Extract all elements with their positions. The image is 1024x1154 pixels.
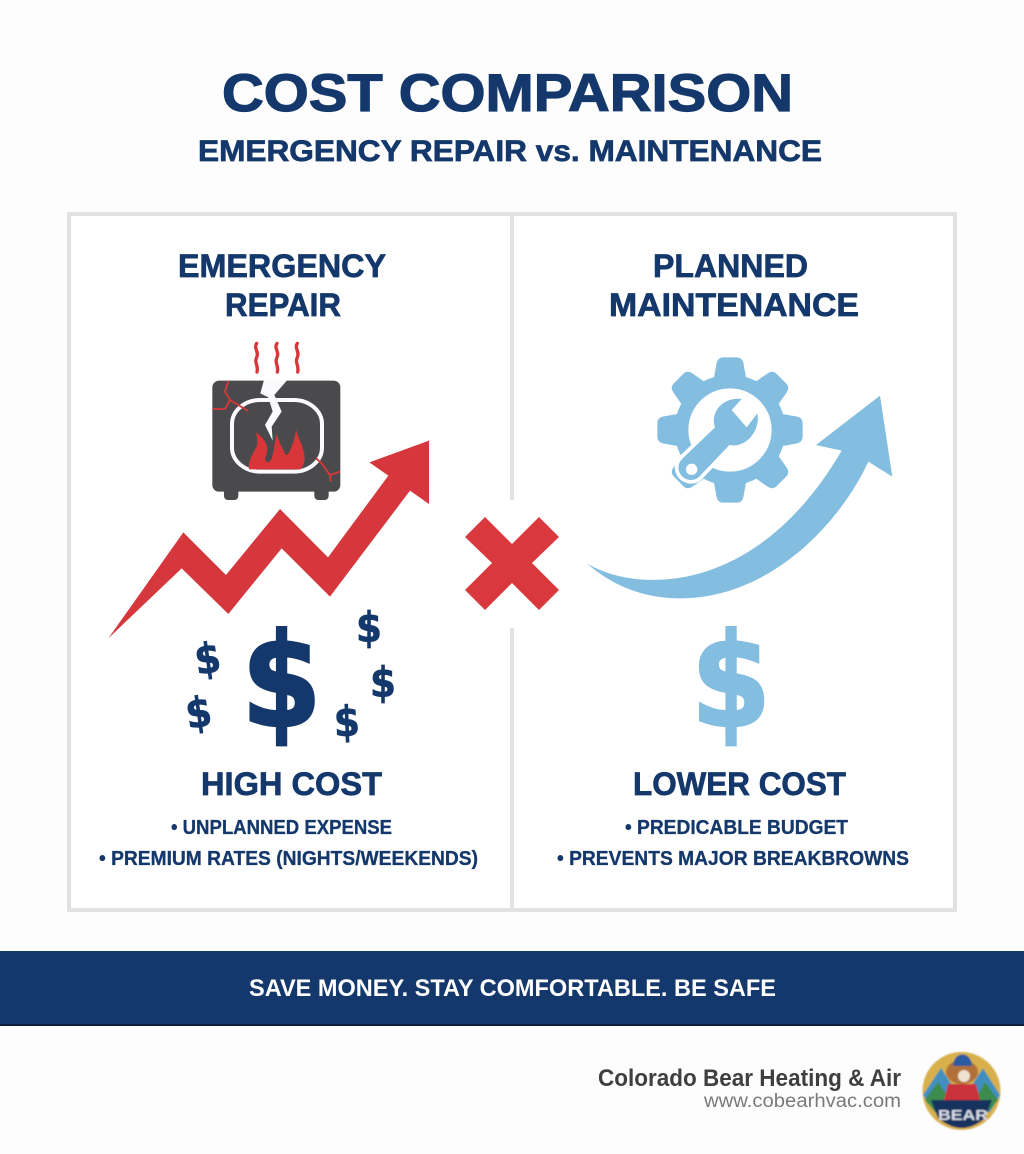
heading: emergency repair	[178, 248, 386, 323]
subtitle: EMERGENCY REPAIR vs. MAINTENANCE	[198, 135, 822, 168]
label: high cost: HIGH COST	[201, 766, 382, 802]
heading: emergency repair: EMERGENCY	[178, 248, 386, 284]
icon: dollar signs: $	[191, 632, 224, 685]
icon: rising blue arrow	[587, 396, 892, 598]
heading: planned maintenance: MAINTENANCE	[609, 287, 859, 323]
heading: planned maintenance: PLANNED	[653, 248, 808, 284]
logo: bear badge	[922, 1052, 1000, 1130]
text block: maintenance bullets	[557, 817, 909, 870]
icon: gear and wrench	[657, 357, 803, 503]
label: lower cost: LOWER COST	[633, 766, 846, 802]
icon: dollar signs: $	[242, 605, 322, 757]
text block: emergency bullets	[99, 817, 478, 870]
icon: dollar signs: $	[356, 603, 382, 652]
panel: planned maintenance	[557, 248, 909, 870]
icon: dollar signs: $	[370, 658, 396, 707]
banner	[0, 951, 1024, 1026]
logo: bear badge: BEAR	[938, 1107, 988, 1124]
footer: company name: Colorado Bear Heating & Air	[598, 1065, 901, 1092]
text block: emergency bullets: • PREMIUM RATES (NIGHTS/WEEKENDS)	[99, 848, 478, 870]
icon: dollar signs	[182, 603, 396, 757]
icon: broken furnace	[212, 343, 340, 500]
text block: emergency bullets: • UNPLANNED EXPENSE	[171, 817, 392, 839]
icon: dollar signs: $	[182, 686, 215, 739]
heading: emergency repair: REPAIR	[225, 287, 341, 323]
icon: rising red arrow	[108, 441, 429, 638]
banner: SAVE MONEY. STAY COMFORTABLE. BE SAFE	[249, 975, 776, 1002]
footer: website: www.cobearhvac.com	[703, 1091, 901, 1112]
panel: emergency repair	[99, 248, 478, 870]
heading: planned maintenance	[609, 248, 859, 323]
text block: maintenance bullets: • PREVENTS MAJOR BREAKBROWNS	[557, 848, 909, 870]
icon: dollar signs: $	[333, 697, 361, 746]
icon: red X	[465, 500, 559, 628]
panel: comparison frame	[69, 214, 955, 910]
icon: blue dollar sign: $	[691, 605, 771, 757]
title: COST COMPARISON	[222, 64, 793, 123]
text block: maintenance bullets: • PREDICABLE BUDGET	[625, 817, 848, 839]
